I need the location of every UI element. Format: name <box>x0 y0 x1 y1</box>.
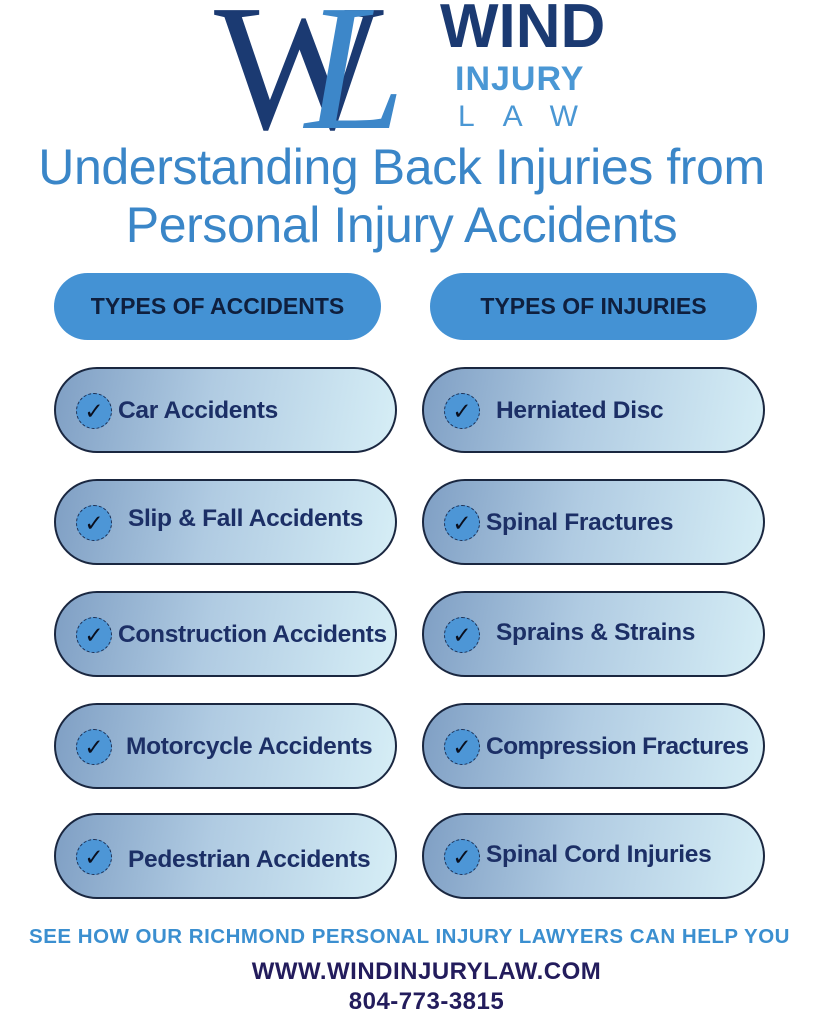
pill: spinal cord injuries: ✓ <box>452 844 472 870</box>
pill: motorcycle: ✓ <box>84 734 104 760</box>
footer tagline: SEE HOW OUR RICHMOND PERSONAL INJURY LAWYERS CAN HELP YOU <box>29 925 790 948</box>
pill: pedestrian <box>54 813 397 899</box>
pill: spinal fractures <box>422 479 765 565</box>
title: Personal Injury Accidents <box>126 197 677 253</box>
logo <box>214 0 606 167</box>
title <box>38 139 765 253</box>
pill: sprains & strains: ✓ <box>452 622 472 648</box>
header: types of injuries: TYPES OF INJURIES <box>480 293 707 319</box>
pill: slip & fall: ✓ <box>84 510 104 536</box>
footer contact: 804-773-3815 <box>349 988 504 1015</box>
pill: pedestrian: Pedestrian Accidents <box>128 846 370 873</box>
pill: car accidents: Car Accidents <box>118 397 278 424</box>
header: types of injuries <box>430 273 757 340</box>
logo text INJURY: INJURY <box>455 60 584 98</box>
pill: compression fractures: ✓ <box>452 734 472 760</box>
pill: motorcycle: Motorcycle Accidents <box>126 733 372 760</box>
pill: spinal fractures: ✓ <box>452 510 472 536</box>
pill: pedestrian: ✓ <box>84 844 104 870</box>
pill: slip & fall <box>54 479 397 565</box>
pill: sprains & strains <box>422 591 765 677</box>
pill: construction <box>54 591 397 677</box>
pill: car accidents: ✓ <box>84 398 104 424</box>
pill: spinal cord injuries: Spinal Cord Injuries <box>486 841 711 868</box>
pill: motorcycle <box>54 703 397 789</box>
pill: herniated disc: ✓ <box>452 398 472 424</box>
footer contact: WWW.WINDINJURYLAW.COM <box>252 958 601 985</box>
pill: spinal cord injuries <box>422 813 765 899</box>
header: types of accidents <box>54 273 381 340</box>
logo text LAW: LAW <box>458 100 606 133</box>
pill: herniated disc <box>422 367 765 453</box>
pill: compression fractures <box>422 703 765 789</box>
pill: compression fractures: Compression Fractures <box>486 733 748 760</box>
pill: sprains & strains: Sprains & Strains <box>496 619 695 646</box>
pill: construction: ✓ <box>84 622 104 648</box>
pill: car accidents <box>54 367 397 453</box>
pill: herniated disc: Herniated Disc <box>496 397 663 424</box>
header: types of accidents: TYPES OF ACCIDENTS <box>91 293 344 319</box>
pill: spinal fractures: Spinal Fractures <box>486 509 673 536</box>
pill: slip & fall: Slip & Fall Accidents <box>128 505 363 532</box>
pill: construction: Construction Accidents <box>118 621 387 648</box>
footer contact <box>252 958 601 1015</box>
title: Understanding Back Injuries from <box>38 139 765 195</box>
